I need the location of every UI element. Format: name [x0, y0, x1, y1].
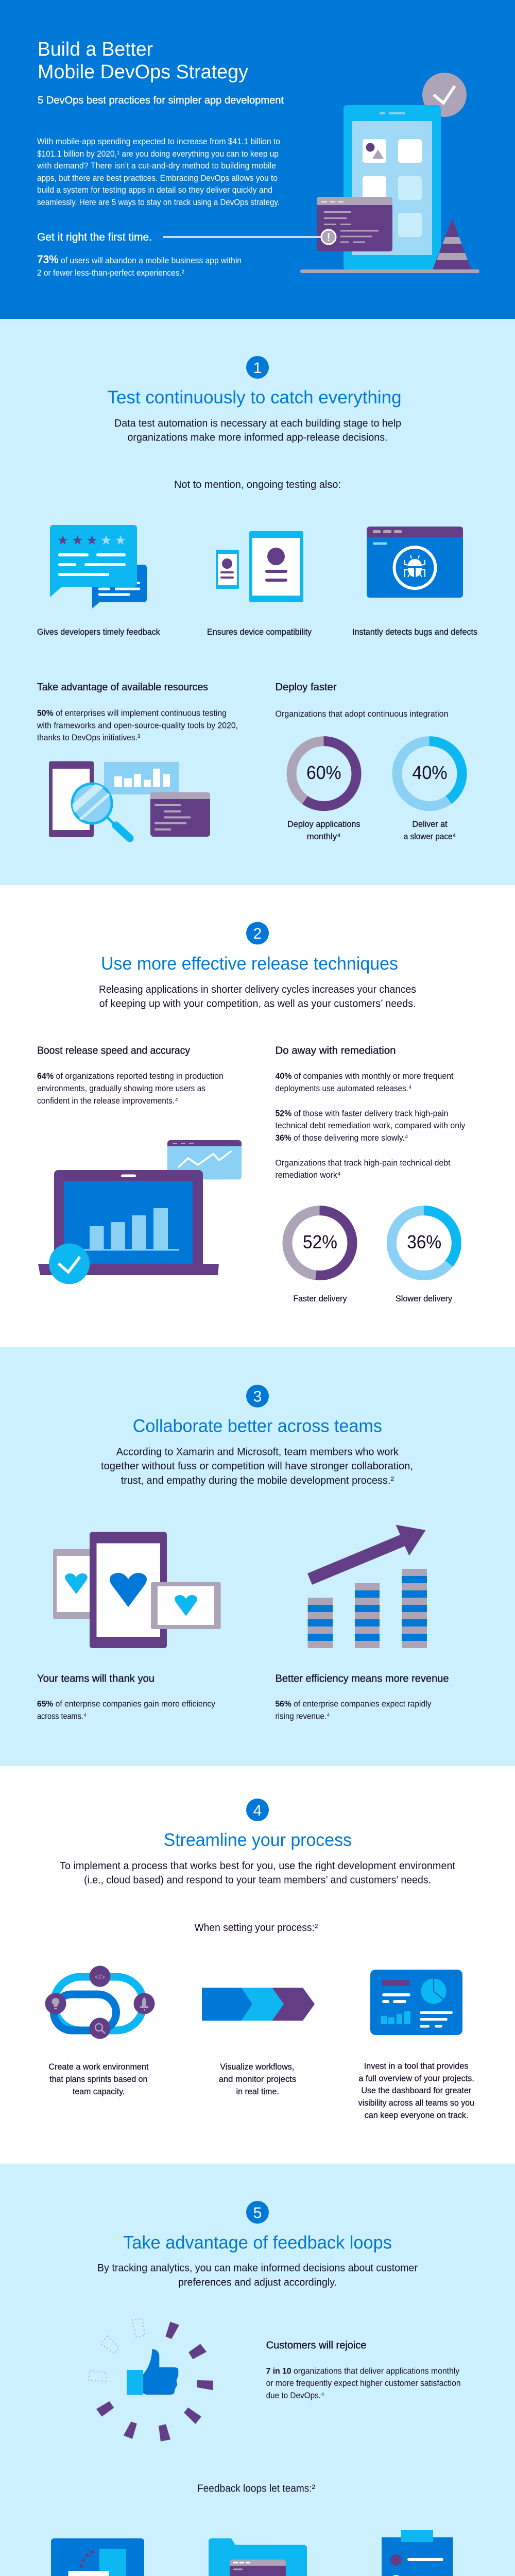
panel: section 2 release techniques — [0, 885, 515, 1347]
callout statistic: 2 or fewer less-than-perfect experiences.² — [37, 268, 184, 278]
label: team capacity. — [73, 2087, 125, 2096]
label: Invest in a tool that provides — [364, 2061, 469, 2071]
intro paragraph: build a system for testing apps in detail so they deliver quickly and — [37, 185, 272, 195]
number badge 3: 3 — [253, 1388, 262, 1405]
block: customers will rejoice: or more frequently expect higher customer satisfaction — [266, 2379, 461, 2388]
block: customers will rejoice: due to DevOps.⁴ — [266, 2391, 324, 2400]
intro text — [114, 418, 401, 443]
number badge 5 — [246, 2201, 269, 2224]
block: boost release speed: 64% of organizations reported testing in production — [37, 1072, 224, 1081]
intro text: organizations make more informed app-release decisions. — [128, 432, 387, 443]
block: do away with remediation: 40% of companies with monthly or more frequent — [275, 1072, 454, 1081]
icon: change bubble — [51, 2538, 144, 2576]
block: your teams will thank you — [37, 1673, 216, 1721]
subheading: Not to mention, ongoing testing also: — [174, 479, 341, 490]
block: do away with remediation: remediation work⁴ — [275, 1171, 341, 1180]
block: better efficiency: 56% of enterprise companies expect rapidly — [275, 1700, 432, 1709]
intro paragraph — [37, 137, 280, 207]
number badge 3 — [246, 1385, 269, 1408]
intro text: According to Xamarin and Microsoft, team members who work — [116, 1447, 399, 1458]
subtitle: 5 DevOps best practices for simpler app development — [38, 95, 284, 106]
number badge 1 — [246, 356, 269, 379]
block: customers will rejoice — [266, 2340, 461, 2400]
intro text: preferences and adjust accordingly. — [178, 2277, 337, 2289]
donut chart: 40% slower pace: Deliver at — [412, 819, 448, 829]
block: do away with remediation: Do away with remediation — [275, 1045, 396, 1057]
intro text: By tracking analytics, you can make informed decisions about customer — [97, 2263, 418, 2274]
block: boost release speed: environments, gradually showing more users as — [37, 1084, 205, 1093]
block: do away with remediation: 36% of those delivering more slowly.⁴ — [275, 1133, 408, 1143]
illustration: phone with alert window and cone: ! — [327, 231, 331, 244]
intro text: of keeping up with your competition, as well as your customers’ needs. — [99, 998, 416, 1010]
callout heading: Get it right the first time. — [37, 231, 152, 243]
intro text: (i.e., cloud based) and respond to your team members’ and customers’ needs. — [84, 1874, 431, 1886]
block: deploy faster: Organizations that adopt continuous integration — [275, 709, 448, 719]
label — [219, 2062, 296, 2096]
block: customers will rejoice: 7 in 10 organizations that deliver applications monthly — [266, 2366, 460, 2376]
donut chart: 60% deploy monthly — [287, 741, 360, 841]
block: take advantage of available resources: thanks to DevOps initiatives.³ — [37, 733, 140, 742]
illustration: laptop with rising bars — [38, 1140, 242, 1284]
callout statistic — [37, 253, 242, 278]
block: boost release speed — [37, 1045, 224, 1106]
block: do away with remediation: 52% of those with faster delivery track high-pain — [275, 1109, 448, 1118]
block: your teams will thank you: Your teams will thank you — [37, 1673, 154, 1685]
heading: Test continuously to catch everything — [107, 387, 402, 408]
block: better efficiency: rising revenue.⁴ — [275, 1712, 330, 1721]
donut chart: 40% slower pace — [397, 741, 462, 841]
block: your teams will thank you: across teams.⁴ — [37, 1712, 87, 1721]
intro text: Data test automation is necessary at each building stage to help — [114, 418, 401, 429]
label: Use the dashboard for greater — [362, 2086, 471, 2095]
illustration: devices with hearts — [53, 1532, 221, 1648]
label: and monitor projects — [219, 2074, 296, 2084]
donut chart: 52% faster delivery — [287, 1211, 352, 1303]
panel: section 3 collaborate — [0, 1347, 515, 1766]
donut chart: 60% deploy monthly: monthly⁴ — [307, 832, 340, 841]
block: do away with remediation: technical debt remediation work, compared with only — [275, 1121, 466, 1130]
number badge 4 — [246, 1799, 269, 1821]
label: in real time. — [236, 2087, 279, 2096]
title: Mobile DevOps Strategy — [38, 61, 248, 83]
icon: sprint loop — [45, 1966, 154, 2039]
intro text: Releasing applications in shorter delivery cycles increases your chances — [99, 984, 416, 995]
block: do away with remediation: deployments use automated releases.⁴ — [275, 1084, 412, 1093]
number badge 1: 1 — [253, 360, 262, 377]
donut chart: 52% faster delivery: Faster delivery — [294, 1294, 347, 1303]
panel: section 5 feedback loops — [0, 2164, 515, 2576]
donut chart: 36% slower delivery: 36% — [407, 1231, 441, 1252]
number badge 2: 2 — [253, 925, 262, 942]
block: boost release speed: Boost release speed and accuracy — [37, 1045, 190, 1057]
label: Create a work environment — [48, 2062, 149, 2072]
number badge 4: 4 — [253, 1802, 262, 1819]
heading: Take advantage of feedback loops — [123, 2233, 392, 2252]
donut chart: 36% slower delivery — [391, 1211, 456, 1303]
block: do away with remediation: Organizations that track high-pain technical debt — [275, 1158, 451, 1167]
label: Instantly detects bugs and defects — [352, 627, 477, 637]
icon: phone and tablet — [216, 531, 303, 602]
title: Build a Better — [38, 39, 153, 60]
number badge 5: 5 — [253, 2205, 262, 2222]
icon: folder with window and check — [209, 2538, 319, 2576]
donut chart: 52% faster delivery: 52% — [303, 1231, 337, 1252]
panel: section 1 test continuously — [0, 319, 515, 885]
icon: thumbs up with burst — [89, 2318, 213, 2442]
illustration: rising arrow over striped bars — [307, 1525, 427, 1648]
illustration: phone with alert window and cone — [163, 73, 479, 273]
label: Gives developers timely feedback — [37, 627, 160, 637]
label: Ensures device compatibility — [207, 627, 312, 637]
label: visibility across all teams so you — [358, 2098, 474, 2108]
label: a full overview of your projects. — [358, 2074, 474, 2083]
label: can keep everyone on track. — [365, 2110, 468, 2120]
title — [38, 39, 248, 83]
donut chart: 40% slower pace: 40% — [412, 762, 448, 783]
intro text: together without fuss or competition will have stronger collaboration, — [101, 1461, 413, 1472]
label — [358, 2061, 474, 2120]
intro text — [101, 1447, 413, 1486]
label: that plans sprints based on — [49, 2074, 147, 2084]
icon: browser with bug — [367, 527, 463, 598]
icon: workflow chevrons — [202, 1988, 315, 2021]
icon: sprint loop: </> — [95, 1973, 105, 1981]
intro paragraph: with demand? There isn’t a cut-and-dry method to building mobile — [37, 161, 276, 171]
illustration: phone, chart, magnifier, code window — [49, 761, 210, 838]
donut chart: 60% deploy monthly: Deploy applications — [287, 819, 360, 829]
label — [48, 2062, 149, 2096]
subheading: When setting your process:² — [195, 1922, 318, 1934]
block: take advantage of available resources: Take advantage of available resources — [37, 682, 208, 693]
label: Visualize workflows, — [220, 2062, 294, 2072]
heading: Streamline your process — [164, 1830, 352, 1850]
block: deploy faster: Deploy faster — [275, 682, 337, 693]
block: customers will rejoice: Customers will rejoice — [266, 2340, 367, 2351]
callout statistic: 73% of users will abandon a mobile business app within — [37, 253, 242, 266]
intro paragraph: With mobile-app spending expected to increase from $41.1 billion to — [37, 137, 280, 146]
intro paragraph: seamlessly. Here are 5 ways to stay on track using a DevOps strategy. — [37, 198, 280, 207]
block: deploy faster — [275, 682, 448, 719]
block: do away with remediation — [275, 1045, 466, 1180]
number badge 2 — [246, 922, 269, 944]
intro text: trust, and empathy during the mobile development process.² — [121, 1475, 394, 1486]
donut chart: 36% slower delivery: Slower delivery — [396, 1294, 453, 1303]
panel: hero header — [0, 0, 515, 319]
intro text — [99, 984, 416, 1010]
block: take advantage of available resources: 50% of enterprises will implement continuous testing — [37, 709, 227, 718]
heading: Collaborate better across teams — [133, 1416, 382, 1436]
intro paragraph: $101.1 billion by 2020,¹ are you doing everything you can to keep up — [37, 149, 279, 159]
intro text — [60, 1860, 455, 1886]
intro text: To implement a process that works best for you, use the right development environment — [60, 1860, 455, 1872]
block: your teams will thank you: 65% of enterprise companies gain more efficiency — [37, 1700, 216, 1709]
block: take advantage of available resources — [37, 682, 238, 742]
panel: section 4 streamline — [0, 1766, 515, 2164]
intro paragraph: apps, but there are best practices. Embracing DevOps allows you to — [37, 174, 278, 183]
donut chart: 60% deploy monthly: 60% — [306, 762, 341, 783]
icon: feedback chat bubbles — [50, 525, 147, 608]
icon: clipboard checklist — [382, 2530, 453, 2576]
block: take advantage of available resources: with frameworks and open-source-quality tools by 2020, — [37, 721, 238, 731]
subheading: Feedback loops let teams:² — [197, 2483, 315, 2494]
block: better efficiency — [275, 1673, 449, 1721]
block: boost release speed: confident in the release improvements.⁴ — [37, 1096, 178, 1106]
donut chart: 40% slower pace: a slower pace⁴ — [404, 832, 456, 841]
icon: dashboard — [370, 1970, 462, 2035]
intro text — [97, 2263, 418, 2289]
heading: Use more effective release techniques — [101, 954, 398, 974]
block: better efficiency: Better efficiency means more revenue — [275, 1673, 449, 1685]
